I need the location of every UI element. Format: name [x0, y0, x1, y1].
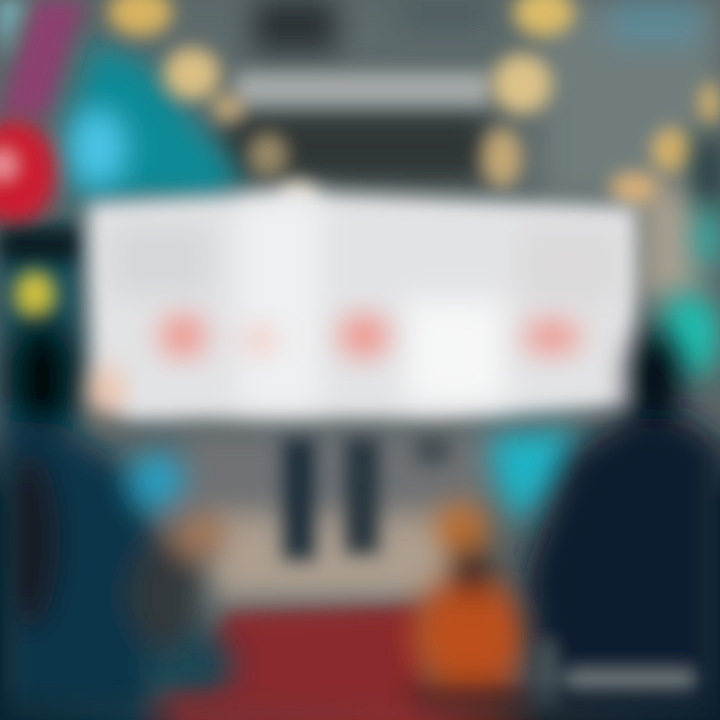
red balloon: [0, 120, 56, 224]
chair bars: [540, 640, 695, 720]
light band: [235, 72, 490, 106]
banner red marks: [161, 316, 580, 356]
orange seated figure: [410, 504, 530, 720]
bottom edge fade: [4, 684, 716, 720]
banner highlights: [110, 200, 620, 410]
legs of presenters: [283, 435, 450, 560]
yellow lamp: [15, 271, 55, 319]
right teal glow: [660, 135, 720, 377]
teal glow right of stage: [490, 430, 580, 525]
right edge fade: [700, 440, 720, 715]
dark band left: [0, 228, 80, 262]
right audience figure: [525, 330, 720, 720]
flag: light blue glow: [68, 108, 128, 188]
red carpet: [150, 605, 430, 720]
flag: pink stripes: [0, 0, 85, 115]
ceiling: [150, 0, 720, 300]
left edge fade: [0, 442, 17, 714]
lower stage: [180, 432, 500, 600]
left audience figure: [0, 323, 234, 720]
banner left glow: [89, 368, 121, 416]
banner: [88, 192, 635, 420]
string lights: [108, 0, 720, 218]
flag: teal: [0, 40, 240, 430]
